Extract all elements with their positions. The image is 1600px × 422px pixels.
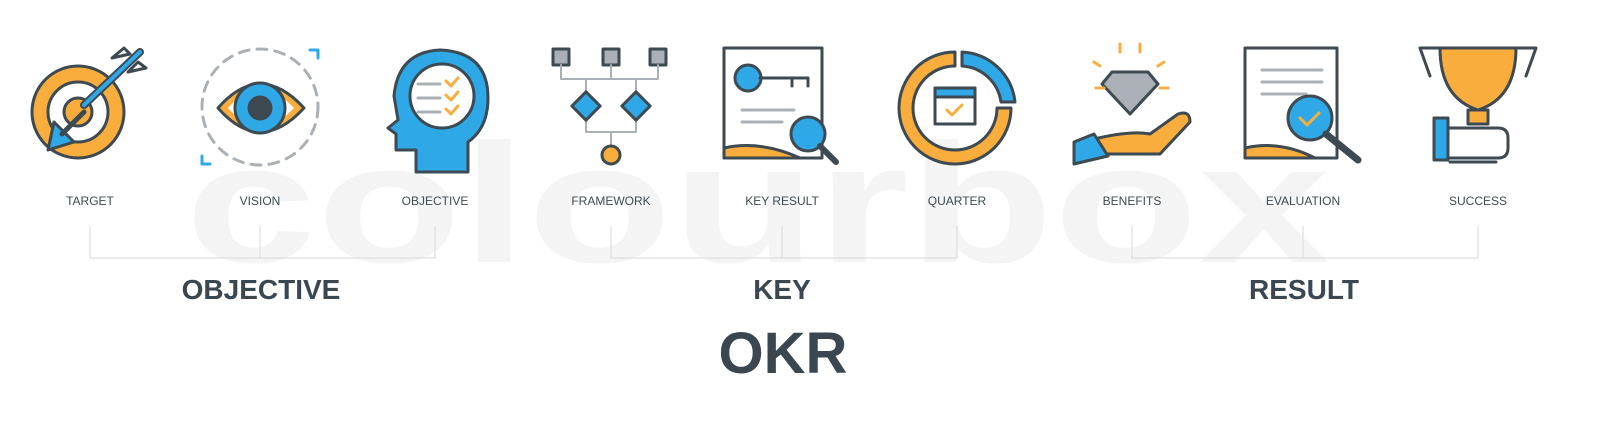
labels: VISION: [240, 194, 280, 208]
labels: TARGET: [66, 194, 115, 208]
watermark: colourbox: [185, 109, 1330, 299]
labels: [66, 194, 1507, 208]
labels: KEY RESULT: [745, 194, 819, 208]
icon: evaluation: [1245, 48, 1358, 160]
icon: benefits: [1074, 44, 1190, 164]
labels: BENEFITS: [1103, 194, 1161, 208]
icon: vision: [202, 49, 318, 165]
headings: OBJECTIVE: [182, 274, 340, 305]
headings: RESULT: [1249, 274, 1359, 305]
icon: framework: [553, 49, 666, 164]
brackets: [90, 226, 1478, 258]
labels: FRAMEWORK: [571, 194, 651, 208]
headings: [182, 274, 1359, 305]
title OKR: OKR: [719, 321, 847, 386]
labels: OBJECTIVE: [402, 194, 468, 208]
labels: SUCCESS: [1449, 194, 1507, 208]
icon: success trophy: [1420, 48, 1536, 162]
icon: target: [32, 48, 146, 158]
icon: quarter: [899, 52, 1015, 164]
icon: key result: [724, 48, 836, 162]
labels: QUARTER: [928, 194, 987, 208]
icon: objective head: [388, 50, 488, 172]
labels: EVALUATION: [1266, 194, 1340, 208]
headings: KEY: [753, 274, 811, 305]
